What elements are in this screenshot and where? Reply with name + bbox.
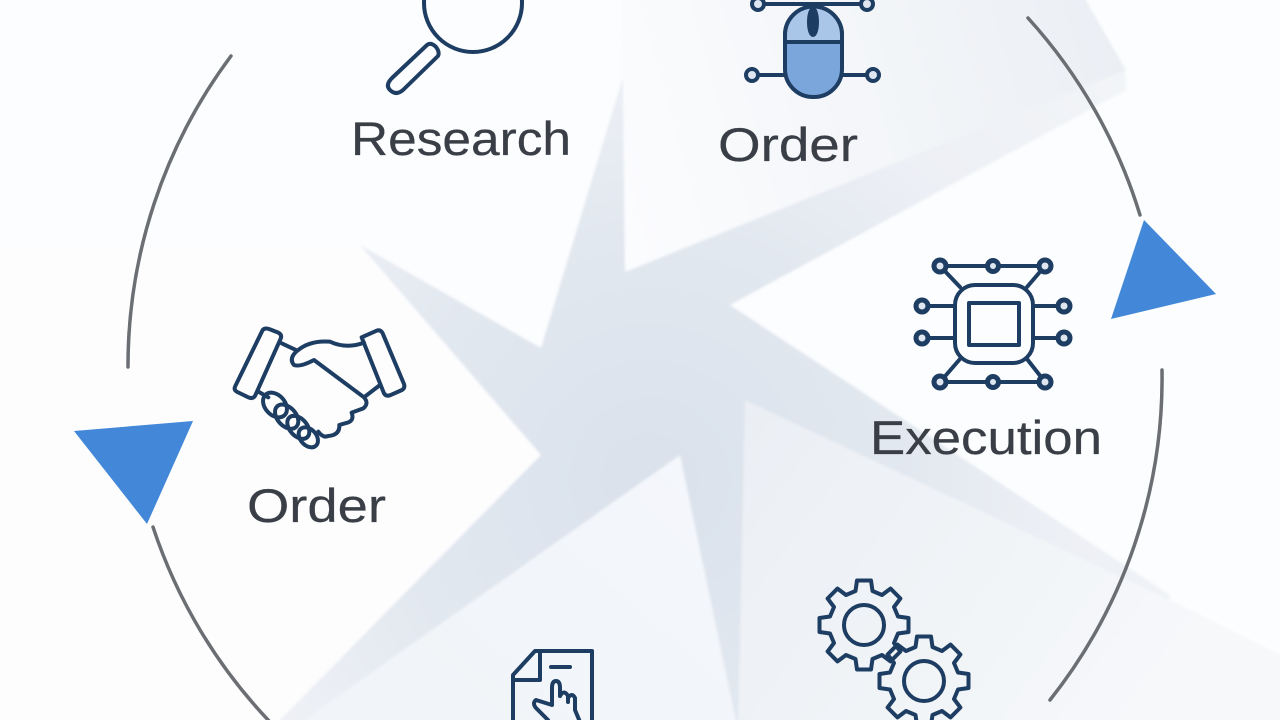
panel: right facet <box>730 90 1280 650</box>
panel: bottom facet <box>290 455 738 720</box>
panel: lower right facet <box>738 400 1280 720</box>
panel: top right facet <box>622 0 1126 272</box>
cycle arcs <box>128 18 1162 720</box>
label: Execution: Execution <box>870 411 1102 464</box>
label: Research: Research <box>351 112 571 165</box>
label: Order (left): Order <box>247 479 386 532</box>
icon: gears <box>820 580 968 720</box>
icon: mouse <box>746 0 879 97</box>
icon: handshake <box>235 328 404 451</box>
label: Order (top): Order <box>718 118 858 171</box>
icon: chip <box>916 260 1070 388</box>
icon: document with pointing hand <box>513 651 592 720</box>
panel: top left facet <box>0 0 622 348</box>
arrow: left triangle <box>74 421 193 524</box>
panel: left facet <box>0 245 541 720</box>
icon: magnifier <box>388 0 522 93</box>
arrow: right triangle <box>1111 220 1216 319</box>
